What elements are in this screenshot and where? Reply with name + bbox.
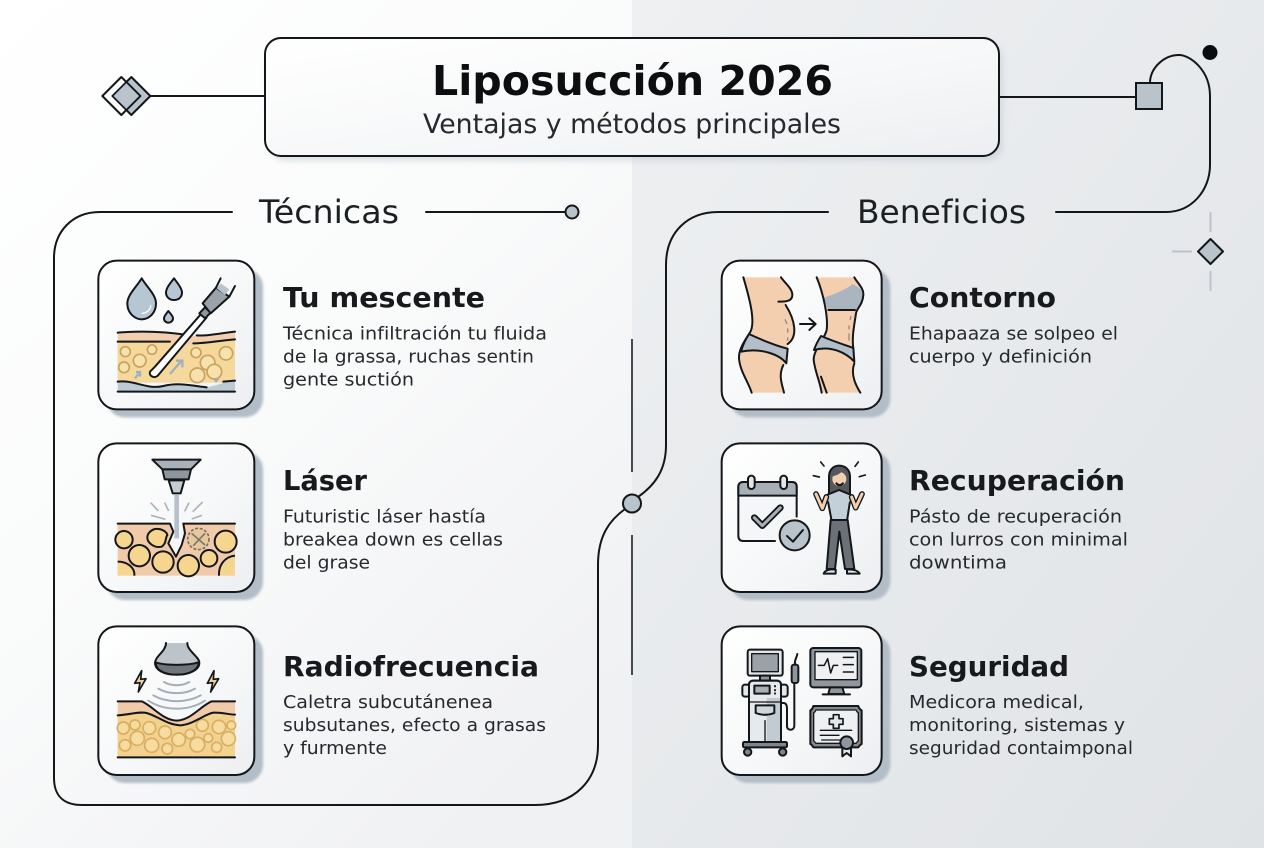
panel: Seguridad <box>722 626 1133 783</box>
panel: Recuperación <box>722 443 1128 600</box>
description: cuerpo y definición <box>909 348 1092 368</box>
description: downtima <box>909 554 1007 574</box>
description: seguridad contaimponal <box>909 739 1133 759</box>
heading: Beneficios: Beneficios <box>857 193 1026 231</box>
connector: Técnicas frame <box>54 206 625 805</box>
description: Caletra subcutánenea <box>283 693 493 713</box>
description: Pásto de recuperación <box>909 508 1122 528</box>
heading: Tu mescente <box>283 281 485 314</box>
decorative diamond node <box>1172 212 1223 291</box>
panel: Tu mescente <box>98 261 547 417</box>
description: Ehapaaza se solpeo el <box>909 324 1118 344</box>
description: Técnica infiltración tu fluida <box>282 324 547 344</box>
connector: title left with diamonds <box>102 77 265 115</box>
panel: Radiofrecuencia <box>98 626 546 783</box>
description: monitoring, sistemas y <box>909 716 1125 736</box>
description: gente suctión <box>283 370 414 390</box>
icon: body contour before and after <box>722 261 890 417</box>
description: subsutanes, efecto a grasas <box>283 716 546 736</box>
heading: Seguridad <box>909 650 1069 683</box>
description <box>283 693 546 759</box>
description: y furmente <box>283 739 387 759</box>
title box <box>265 38 1003 161</box>
icon: medical equipment <box>722 626 890 783</box>
icon: calendar and happy patient <box>722 443 890 600</box>
description <box>909 324 1118 368</box>
description <box>282 324 547 390</box>
panel: Contorno <box>722 261 1118 417</box>
description: de la grassa, ruchas sentin <box>283 348 534 368</box>
connector: title right to Beneficios <box>1000 45 1218 212</box>
background: right half <box>632 0 1264 848</box>
icon: infiltration cannula <box>98 261 263 417</box>
panel: Láser <box>98 443 503 600</box>
icon: radiofrequency <box>98 626 263 783</box>
background: left half <box>0 0 632 848</box>
heading: Recuperación <box>909 464 1125 497</box>
description <box>909 508 1128 574</box>
description <box>283 508 503 574</box>
icon: laser <box>98 443 263 600</box>
description: del grase <box>283 554 370 574</box>
description <box>909 693 1133 759</box>
heading: Radiofrecuencia <box>283 650 539 683</box>
heading: Técnicas: Técnicas <box>258 193 399 231</box>
description: con lurros con minimal <box>909 530 1128 550</box>
connector: Beneficios frame <box>623 212 828 675</box>
subtitle: Ventajas y métodos principales <box>423 109 841 140</box>
heading: Láser <box>283 464 367 497</box>
title: Liposucción 2026 <box>432 57 833 105</box>
heading: Contorno <box>909 281 1056 314</box>
description: Medicora medical, <box>909 693 1084 713</box>
description: breakea down es cellas <box>283 530 503 550</box>
description: Futuristic láser hastía <box>283 508 486 528</box>
